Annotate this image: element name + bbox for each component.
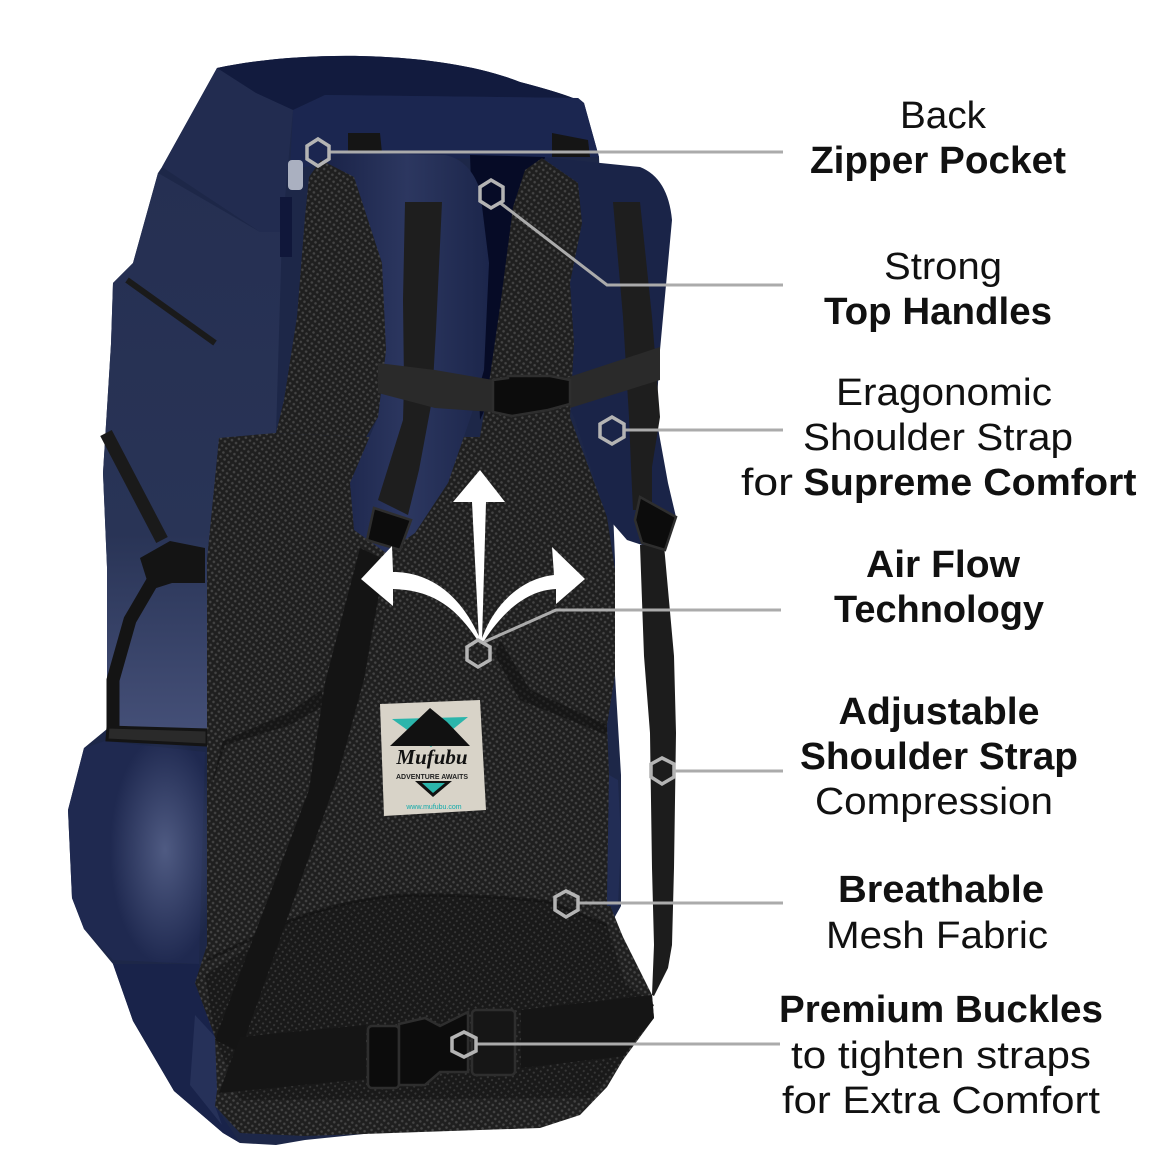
leader: adjustable strap xyxy=(651,758,783,784)
label: buckles: Premium Buckles xyxy=(779,989,1103,1031)
label: adjustable strap: Compression xyxy=(815,781,1053,823)
chest strap xyxy=(378,347,660,412)
left strap mesh xyxy=(276,160,386,437)
label: air flow: Technology xyxy=(834,589,1044,631)
side zipper pocket line xyxy=(127,280,215,343)
airflow arrows xyxy=(361,470,585,641)
waist belt xyxy=(219,995,654,1093)
label: shoulder strap xyxy=(741,372,1137,504)
side panel xyxy=(103,173,282,729)
label: adjustable strap: Adjustable xyxy=(838,691,1040,733)
label: mesh fabric xyxy=(826,869,1048,957)
label: back zipper pocket: Zipper Pocket xyxy=(810,140,1066,182)
bottom corner xyxy=(113,964,240,1143)
waist buckle xyxy=(368,1010,515,1088)
label: back zipper pocket xyxy=(810,95,1066,182)
long left shoulder webbing xyxy=(215,548,385,1052)
brand patch xyxy=(380,700,486,816)
label: adjustable strap xyxy=(800,691,1078,823)
label: buckles xyxy=(779,989,1103,1122)
leader: air flow xyxy=(467,610,781,667)
label: top handles: Strong xyxy=(884,246,1002,288)
left adjuster buckle xyxy=(367,508,411,550)
gap between straps xyxy=(470,155,545,420)
leader: buckles xyxy=(452,1032,780,1057)
label: top handles: Top Handles xyxy=(824,291,1052,333)
mesh fold left xyxy=(210,690,325,790)
label: air flow: Air Flow xyxy=(866,544,1020,586)
lower lumbar pad xyxy=(205,895,654,1100)
leader: mesh xyxy=(555,891,783,917)
label: shoulder strap: Shoulder Strap xyxy=(803,417,1073,459)
leader: back zipper pocket xyxy=(307,139,783,166)
label: mesh fabric: Mesh Fabric xyxy=(826,915,1048,957)
left strap webbing xyxy=(378,202,442,515)
leader: top handles xyxy=(480,180,783,285)
backpack xyxy=(68,56,676,1145)
label: shoulder strap: for xyxy=(741,462,793,504)
top lid xyxy=(217,56,584,110)
leader: ergonomic strap xyxy=(600,417,783,444)
top handles xyxy=(348,133,590,157)
pad top edge shadow xyxy=(207,895,607,960)
zipper pull xyxy=(280,160,303,257)
right strap webbing xyxy=(613,202,660,510)
mesh bottle pocket xyxy=(68,735,220,965)
label: shoulder strap: Supreme Comfort xyxy=(804,462,1137,504)
navy sliver behind mesh xyxy=(607,775,621,906)
brand patch: Mufubu xyxy=(395,745,468,769)
side top pocket xyxy=(162,68,293,232)
back mesh panel xyxy=(195,158,654,1136)
right adjuster buckle xyxy=(635,497,676,550)
mesh fold right xyxy=(495,640,607,735)
label: top handles xyxy=(824,246,1052,333)
label: buckles: to tighten straps xyxy=(791,1035,1091,1077)
label: air flow xyxy=(834,544,1044,631)
brand patch: ADVENTURE AWAITS xyxy=(396,774,468,781)
label: mesh fabric: Breathable xyxy=(838,869,1044,911)
upper panel xyxy=(290,95,599,170)
label: buckles: for Extra Comfort xyxy=(782,1080,1100,1122)
long right shoulder webbing xyxy=(640,545,676,996)
left shoulder strap navy xyxy=(325,153,489,553)
chest buckle xyxy=(493,376,570,416)
label: back zipper pocket: Back xyxy=(900,95,987,137)
right shoulder strap navy xyxy=(510,157,676,547)
main navy body xyxy=(68,56,621,1145)
label: adjustable strap: Shoulder Strap xyxy=(800,736,1078,778)
brand patch: www.mufubu.com xyxy=(405,804,462,811)
side webbing straps xyxy=(106,433,207,745)
label: shoulder strap: Eragonomic xyxy=(836,372,1052,414)
